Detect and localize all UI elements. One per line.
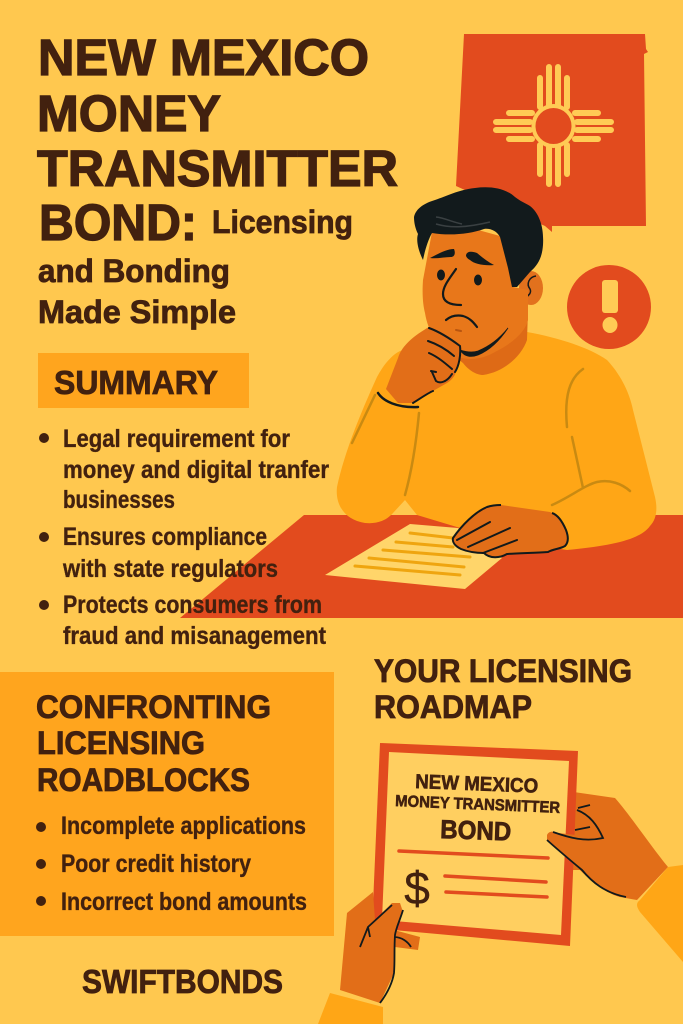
panel: summary bbox=[38, 353, 329, 650]
paper on table bbox=[325, 524, 502, 589]
title: Made Simple bbox=[38, 294, 236, 330]
summary bullet 1: businesses bbox=[63, 486, 175, 514]
roadblocks list: Incorrect bond amounts bbox=[61, 888, 307, 916]
document title: NEW MEXICO bbox=[415, 771, 539, 798]
heading: your licensing roadmap bbox=[374, 653, 632, 725]
summary bullet 3: Protects consumers from bbox=[63, 591, 322, 619]
neck bbox=[440, 310, 528, 375]
roadblocks heading: CONFRONTING bbox=[36, 689, 271, 725]
jaw line bbox=[460, 328, 508, 356]
icon: alert exclamation bbox=[567, 265, 651, 349]
roadblocks heading: LICENSING bbox=[37, 725, 205, 761]
document title bbox=[395, 771, 561, 846]
roadblocks heading: ROADBLOCKS bbox=[37, 762, 250, 798]
document rule lines bbox=[399, 851, 548, 897]
title bbox=[37, 29, 398, 330]
sweater bbox=[337, 332, 656, 550]
hair bbox=[414, 187, 543, 287]
brand name: SWIFTBONDS bbox=[82, 963, 283, 1000]
worried man illustration bbox=[337, 187, 656, 557]
summary bullet 2: Ensures compliance bbox=[63, 523, 267, 551]
nose and mouth bbox=[443, 269, 477, 331]
face bbox=[423, 225, 528, 359]
heading: your licensing roadmap: ROADMAP bbox=[374, 689, 532, 725]
hair highlight bbox=[436, 217, 490, 227]
summary bullet 1: money and digital tranfer bbox=[63, 456, 329, 484]
right hand thumb and sleeve bbox=[547, 805, 683, 962]
heading: your licensing roadmap: YOUR LICENSING bbox=[374, 653, 632, 689]
title: and Bonding bbox=[38, 253, 230, 289]
summary bullet 1 bbox=[39, 425, 329, 514]
summary bullet 2 bbox=[39, 523, 278, 583]
summary heading: SUMMARY bbox=[54, 364, 218, 401]
dollar sign: $ bbox=[404, 862, 430, 914]
left hand and sleeve bbox=[318, 892, 420, 1024]
title: Licensing bbox=[212, 204, 353, 240]
chin hand bbox=[378, 327, 461, 407]
roadblocks list: Incomplete applications bbox=[61, 812, 306, 840]
summary bullet 2: with state regulators bbox=[62, 555, 278, 583]
title: TRANSMITTER bbox=[37, 140, 398, 197]
brows and eyes bbox=[430, 249, 494, 286]
roadblocks list bbox=[36, 812, 307, 916]
summary heading bbox=[38, 353, 249, 408]
title: BOND: bbox=[39, 194, 197, 251]
document title: MONEY TRANSMITTER bbox=[395, 793, 561, 817]
table bbox=[180, 515, 683, 618]
document: bond certificate bbox=[372, 743, 578, 946]
summary bullet 3: fraud and misanagement bbox=[63, 622, 327, 650]
panel: confronting licensing roadblocks bbox=[0, 672, 334, 936]
document title: BOND bbox=[440, 814, 512, 846]
map of New Mexico with Zia symbol bbox=[456, 34, 648, 232]
roadblocks heading bbox=[36, 689, 271, 798]
title: NEW MEXICO bbox=[38, 29, 369, 86]
roadblocks list: Poor credit history bbox=[61, 850, 251, 878]
summary bullet 1: Legal requirement for bbox=[63, 425, 290, 453]
summary bullet 3 bbox=[39, 591, 327, 650]
title: MONEY bbox=[37, 85, 221, 142]
right hand fingers behind document bbox=[540, 790, 668, 900]
ear bbox=[519, 271, 543, 305]
desk hand bbox=[453, 505, 568, 557]
